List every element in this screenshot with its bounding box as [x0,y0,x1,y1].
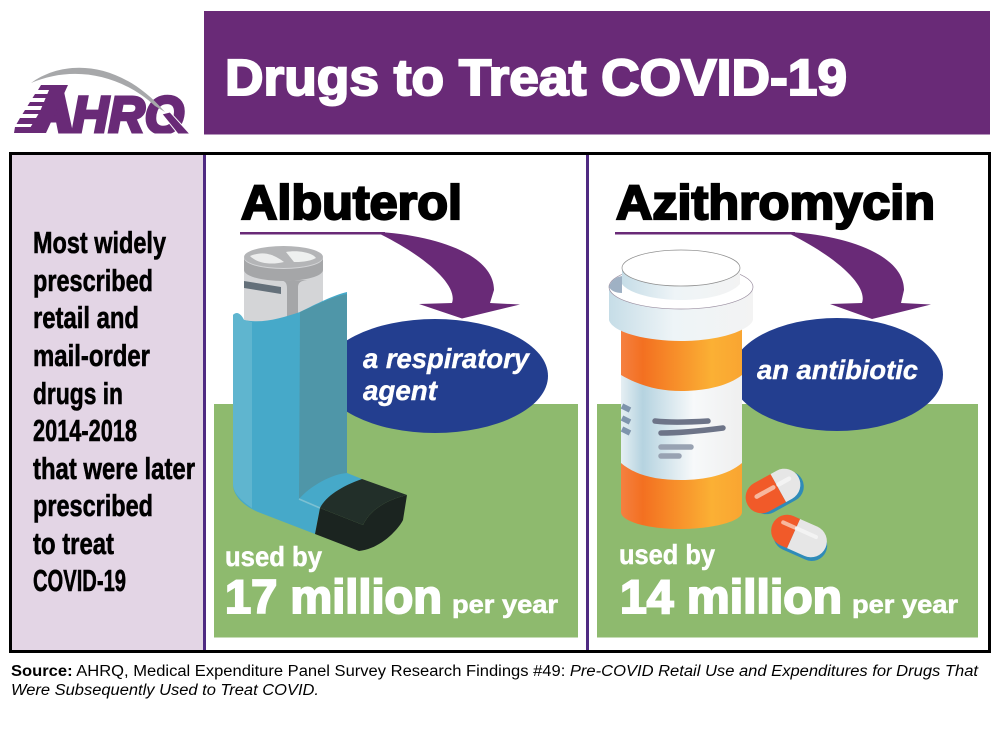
logo wordmark: HRQ [72,87,184,145]
arrow [615,232,931,319]
source note [11,663,979,699]
panel: description: prescribed [33,263,153,298]
per year: per year [852,591,958,619]
category oval [322,319,548,433]
logo wordmark [40,90,185,134]
count: 17 million [225,570,442,623]
panel: description: 2014-2018 [33,413,137,448]
logo A stripes [6,83,68,135]
panel: description: to treat [33,526,114,561]
panel: albuterol [214,177,578,638]
used by: used by [619,539,715,570]
panel: description: mail-order [33,338,150,373]
arrow [240,232,520,318]
AHRQ logo [14,68,189,134]
main frame [10,154,990,652]
category oval [731,318,943,431]
panel: description: retail and [33,300,139,335]
title banner [204,11,990,134]
logo Q tail [162,112,190,134]
panel: description: drugs in [33,376,123,411]
source note: Source: AHRQ, Medical Expenditure Panel Survey Research Findings #49: Pre-COVID Retail Use and Expenditures for Drugs That [11,663,979,680]
icon: pill bottle [609,250,753,529]
logo arc [31,68,165,112]
drug name: Albuterol [241,177,462,230]
panel: description: Most widely [33,225,167,260]
category label: agent [363,375,439,406]
used by: used by [225,541,322,572]
category label: a respiratory [363,343,531,374]
panel: description [33,225,195,598]
logo wordmark: A [13,73,78,147]
green background [214,404,578,638]
icon: capsules [740,462,834,566]
category label [363,343,531,406]
category label: an antibiotic [757,355,918,385]
icon: inhaler [233,246,407,551]
panel: description: prescribed [33,488,153,523]
label lines [622,406,723,456]
panel: azithromycin [597,177,978,638]
panel: description: that were later [33,451,195,486]
source note: Were Subsequently Used to Treat COVID. [11,682,319,699]
green background [597,404,978,638]
drug name: Azithromycin [616,177,935,230]
panel: description: COVID-19 [33,563,126,598]
count: 14 million [620,570,842,623]
title: Drugs to Treat COVID-19 [225,49,847,106]
per year: per year [452,591,558,619]
